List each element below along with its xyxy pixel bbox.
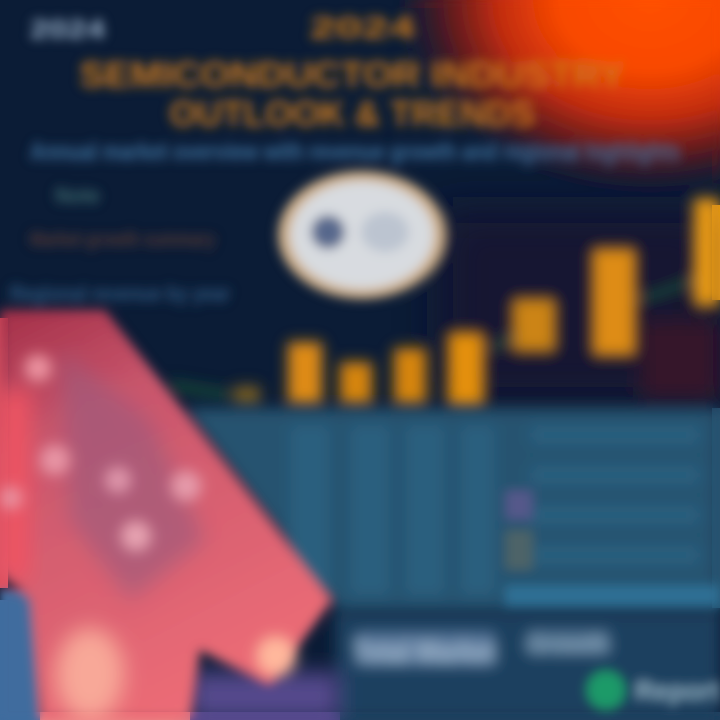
bottom band — [335, 612, 720, 720]
background glow — [400, 0, 720, 400]
bottom label two: Growth — [525, 630, 610, 660]
left lower block — [0, 590, 40, 720]
logo badge — [278, 171, 446, 299]
left caption: Market growth summary — [30, 229, 216, 251]
title: 2024 — [310, 10, 416, 45]
muted inner area — [60, 350, 205, 600]
lower glow — [56, 628, 124, 720]
left source line: Regional revenue by year — [10, 281, 230, 306]
glow nodes — [0, 355, 296, 676]
top left label: 2024 — [30, 14, 106, 44]
title — [80, 10, 624, 134]
icon: green circle — [586, 670, 626, 710]
data table panel — [185, 408, 720, 612]
legend swatches — [505, 490, 533, 570]
table footer strip — [505, 585, 720, 607]
table columns — [290, 425, 700, 595]
bright left streak — [0, 390, 30, 580]
title: SEMICONDUCTOR INDUSTRY — [80, 54, 624, 95]
icon: logo mark — [311, 215, 345, 249]
bar chart — [170, 198, 720, 406]
small note: Note — [55, 183, 100, 208]
title: OUTLOOK & TRENDS — [170, 93, 534, 134]
lower purple block — [190, 672, 340, 720]
bottom label one: Total Market — [352, 636, 497, 669]
red arrow graphic — [0, 310, 332, 720]
